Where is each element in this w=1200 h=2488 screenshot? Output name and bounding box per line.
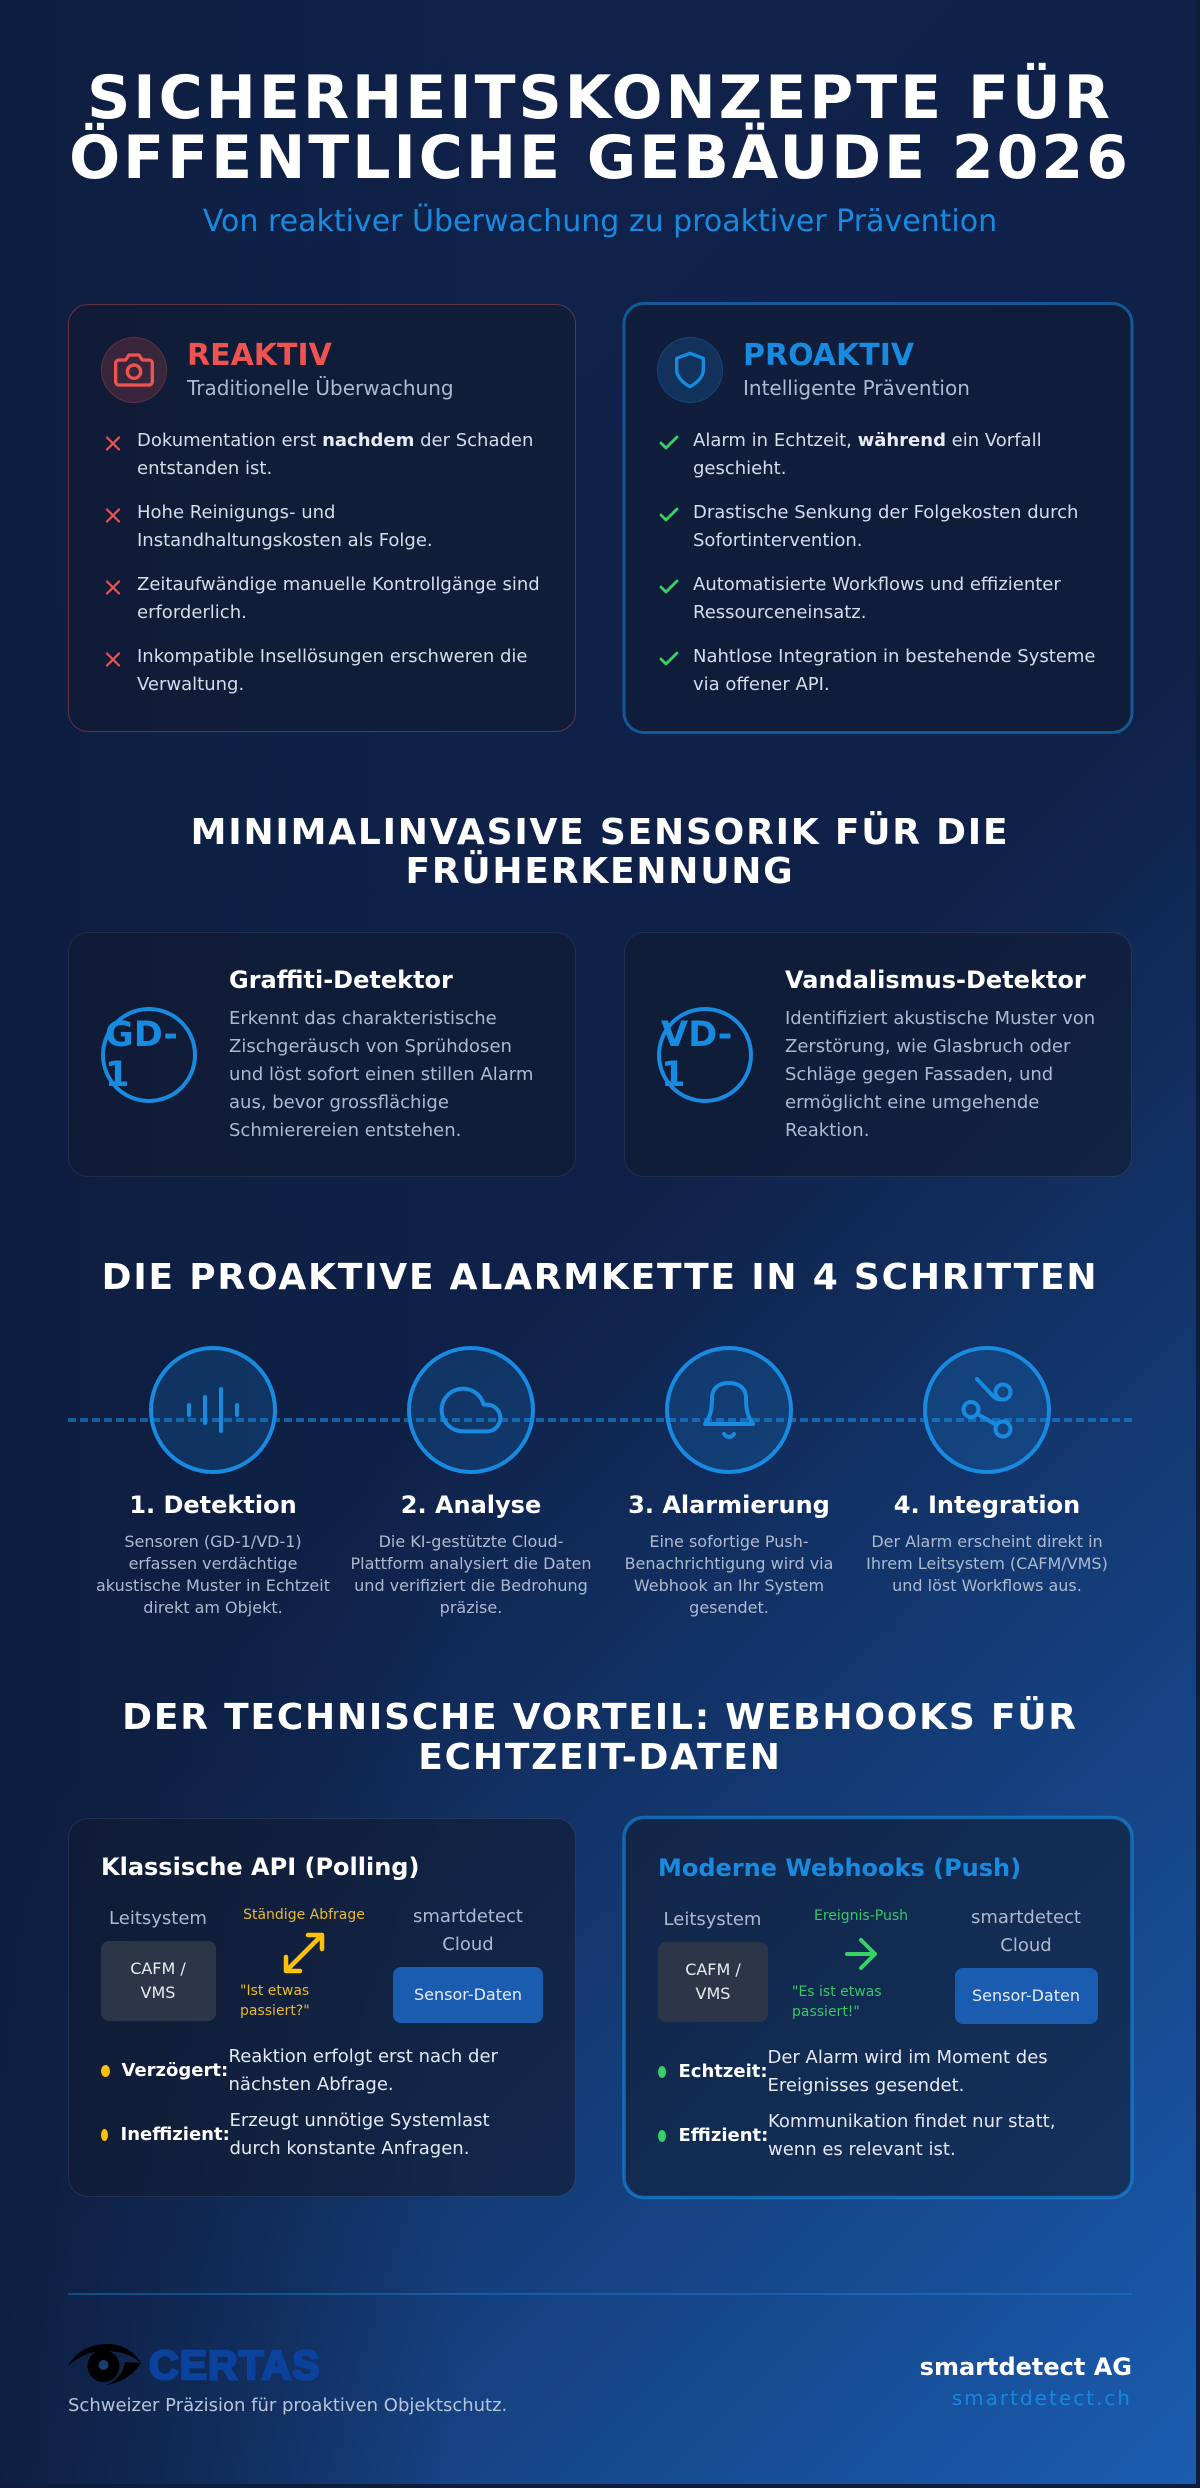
heading: vandalism detector: Vandalismus-Detektor (785, 966, 1086, 994)
list: reaktiv drawbacks: Dokumentation erst nachdem der Schaden (137, 430, 533, 451)
tagline: Schweizer Präzision für proaktiven Objektschutz. (68, 2395, 507, 2416)
icon: sound wave (151, 1348, 275, 1472)
diagram: polling (101, 1906, 543, 2023)
list: proaktiv benefits (661, 430, 1096, 695)
list: reaktiv drawbacks: Hohe Reinigungs- und (137, 502, 335, 523)
heading: polling: Klassische API (Polling) (101, 1853, 419, 1881)
text: step 2: und verifiziert die Bedrohung (354, 1576, 588, 1595)
company name: smartdetect AG (920, 2353, 1132, 2381)
badge: VD-1 (659, 1009, 751, 1101)
diagram: push: Ereignis-Push (814, 1908, 908, 1924)
bullet: ineffizient: Ineffizient: (120, 2124, 230, 2145)
list: proaktiv benefits: Ressourceneinsatz. (693, 602, 866, 623)
text: vandalism detector (785, 1008, 1095, 1141)
dashed connector line (68, 1418, 1132, 1422)
icon: camera (102, 338, 166, 402)
text: graffiti detector: und löst sofort einen stillen Alarm (229, 1064, 533, 1085)
icon: bell (667, 1348, 791, 1472)
subheading: reaktiv: Traditionelle Überwachung (186, 376, 454, 400)
icon: cloud (409, 1348, 533, 1472)
diagram: push: passiert!" (792, 2004, 860, 2020)
heading: proaktiv: PROAKTIV (743, 338, 915, 373)
text: graffiti detector: Erkennt das charakteristische (229, 1008, 497, 1029)
diagram: push: Cloud (1000, 1935, 1052, 1956)
heading: webhooks: ECHTZEIT-DATEN (418, 1737, 782, 1778)
title: ÖFFENTLICHE GEBÄUDE 2026 (69, 121, 1131, 193)
list: reaktiv drawbacks: Verwaltung. (137, 674, 244, 695)
list: reaktiv drawbacks (107, 430, 540, 695)
panel: klassische api (68, 1818, 576, 2196)
diagram: push: Sensor-Daten (972, 1986, 1080, 2005)
text: step 4: und löst Workflows aus. (892, 1576, 1082, 1595)
badge: VD-1: VD- (661, 1015, 732, 1055)
text: vandalism detector: Schläge gegen Fassaden, und (785, 1064, 1053, 1085)
heading: sensorik: FRÜHERKENNUNG (405, 850, 795, 892)
list: proaktiv benefits: Sofortintervention. (693, 530, 863, 551)
heading: reaktiv: REAKTIV (187, 338, 333, 373)
diagram: polling: Sensor-Daten (414, 1985, 522, 2004)
list: reaktiv drawbacks: Inkompatible Insellösungen erschweren die (137, 646, 527, 667)
badge: GD-1: 1 (105, 1055, 129, 1095)
text: step 3: gesendet. (689, 1598, 769, 1617)
text: step 3 (625, 1532, 833, 1617)
text: step 4: Ihrem Leitsystem (CAFM/VMS) (866, 1554, 1108, 1573)
diagram: push: CAFM / (685, 1960, 741, 1979)
diagram: polling: "Ist etwas (240, 1983, 309, 1999)
badge: VD-1: 1 (661, 1055, 685, 1095)
diagram: polling: VMS (141, 1983, 175, 2002)
diagram: push: "Es ist etwas (792, 1984, 882, 2000)
step 3: alarmierung (625, 1348, 833, 1617)
text: step 1: akustische Muster in Echtzeit (96, 1576, 330, 1595)
wordmark: CERTAS (149, 2342, 321, 2388)
badge: GD-1: GD- (105, 1015, 178, 1055)
diagram: push: VMS (696, 1984, 730, 2003)
diagram: push: Leitsystem (664, 1909, 761, 1930)
panel: moderne webhooks (624, 1818, 1132, 2198)
text: step 3: Eine sofortige Push- (649, 1532, 809, 1551)
list: proaktiv benefits: Nahtlose Integration in bestehende Systeme (693, 646, 1096, 667)
text: step 1 (96, 1532, 330, 1617)
text: step 1: erfassen verdächtige (129, 1554, 297, 1573)
diagram: push: smartdetect (971, 1907, 1081, 1928)
heading: step 4: 4. Integration (894, 1491, 1080, 1519)
diagram: polling: Ständige Abfrage (243, 1907, 365, 1923)
bullet: echtzeit: Der Alarm wird im Moment des (768, 2047, 1048, 2068)
bullet: effizient: Effizient: (678, 2125, 768, 2146)
text: step 2: Plattform analysiert die Daten (351, 1554, 591, 1573)
text: step 3: Webhook an Ihr System (634, 1576, 824, 1595)
heading: sensorik: MINIMALINVASIVE SENSORIK FÜR DIE (191, 811, 1009, 853)
list: reaktiv drawbacks: entstanden ist. (137, 458, 272, 479)
diagram: polling: Cloud (442, 1934, 494, 1955)
bullet: echtzeit: Ereignisses gesendet. (768, 2075, 964, 2096)
bullet: verzögert: Reaktion erfolgt erst nach der (228, 2046, 499, 2067)
diagram: polling: passiert?" (240, 2003, 310, 2019)
text: step 1: Sensoren (GD-1/VD-1) (124, 1532, 302, 1551)
icon: share nodes (925, 1348, 1049, 1472)
text: step 2 (351, 1532, 591, 1617)
bullet: effizient: wenn es relevant ist. (768, 2139, 956, 2160)
text: graffiti detector: aus, bevor grossflächige (229, 1092, 449, 1113)
title (69, 62, 1131, 193)
diagram: polling: Leitsystem (109, 1908, 207, 1929)
title: SICHERHEITSKONZEPTE FÜR (87, 62, 1113, 133)
text: step 2: präzise. (440, 1598, 502, 1617)
bullet: echtzeit (658, 2047, 1048, 2096)
subtitle: Von reaktiver Überwachung zu proaktiver Prävention (203, 203, 997, 239)
list: reaktiv drawbacks: Zeitaufwändige manuelle Kontrollgänge sind (137, 574, 540, 595)
bullet: ineffizient: durch konstante Anfragen. (230, 2138, 469, 2159)
text: step 4: Der Alarm erscheint direkt in (871, 1532, 1103, 1551)
bullet: effizient (658, 2111, 1055, 2160)
text: step 1: direkt am Objekt. (143, 1598, 283, 1617)
text: graffiti detector: Zischgeräusch von Sprühdosen (229, 1036, 512, 1057)
heading: webhooks: DER TECHNISCHE VORTEIL: WEBHOOKS FÜR (122, 1696, 1078, 1738)
badge: GD-1 (103, 1009, 195, 1101)
company url: smartdetect.ch (952, 2386, 1132, 2410)
icon: eye (68, 2344, 141, 2385)
step 2: analyse (351, 1348, 591, 1617)
text: graffiti detector (229, 1008, 533, 1141)
text: graffiti detector: Schmierereien entstehen. (229, 1120, 461, 1141)
heading: step 1: 1. Detektion (129, 1491, 297, 1519)
bullet: effizient: Kommunikation findet nur statt, (768, 2111, 1055, 2132)
icon: shield (658, 338, 722, 402)
panel: reaktiv (68, 304, 576, 732)
bullet: echtzeit: Echtzeit: (678, 2061, 768, 2082)
step 4: integration (866, 1348, 1108, 1595)
bullet: verzögert: nächsten Abfrage. (228, 2074, 394, 2095)
list: proaktiv benefits: Automatisierte Workflows und effizienter (693, 574, 1061, 595)
bullet: verzögert: Verzögert: (122, 2060, 228, 2081)
bullet: ineffizient: Erzeugt unnötige Systemlast (230, 2110, 490, 2131)
text: vandalism detector: Zerstörung, wie Glasbruch oder (785, 1036, 1071, 1057)
panel: vandalism detector (624, 932, 1132, 1176)
text: step 2: Die KI-gestützte Cloud- (379, 1532, 563, 1551)
heading: sensorik (191, 811, 1009, 892)
heading: step 3: 3. Alarmierung (628, 1491, 830, 1519)
logo: certas (68, 2342, 321, 2388)
text: vandalism detector: Identifiziert akustische Muster von (785, 1008, 1095, 1029)
diagram: polling: CAFM / (130, 1959, 186, 1978)
panel: proaktiv (624, 304, 1132, 732)
bullet: verzögert (101, 2046, 499, 2095)
footer divider (68, 2293, 1132, 2295)
text: vandalism detector: ermöglicht eine umgehende (785, 1092, 1039, 1113)
list: proaktiv benefits: via offener API. (693, 674, 830, 695)
list: proaktiv benefits: Alarm in Echtzeit, während ein Vorfall (693, 430, 1042, 451)
step 1: detektion (96, 1348, 330, 1617)
list: proaktiv benefits: Drastische Senkung der Folgekosten durch (693, 502, 1078, 523)
text: step 3: Benachrichtigung wird via (625, 1554, 833, 1573)
heading: graffiti detector: Graffiti-Detektor (229, 966, 453, 994)
heading: push: Moderne Webhooks (Push) (658, 1854, 1021, 1882)
text: vandalism detector: Reaktion. (785, 1120, 869, 1141)
panel: graffiti detector (68, 932, 576, 1176)
diagram: push (658, 1907, 1098, 2024)
heading: step 2: 2. Analyse (401, 1491, 541, 1519)
heading: webhooks (122, 1696, 1078, 1778)
list: reaktiv drawbacks: Instandhaltungskosten als Folge. (137, 530, 433, 551)
list: reaktiv drawbacks: erforderlich. (137, 602, 247, 623)
heading: alarmkette: DIE PROAKTIVE ALARMKETTE IN 4 SCHRITTEN (102, 1257, 1098, 1298)
text: step 4 (866, 1532, 1108, 1595)
subheading: proaktiv: Intelligente Prävention (743, 376, 970, 400)
list: proaktiv benefits: geschieht. (693, 458, 786, 479)
bullet: ineffizient (101, 2110, 490, 2159)
diagram: polling: smartdetect (413, 1906, 523, 1927)
